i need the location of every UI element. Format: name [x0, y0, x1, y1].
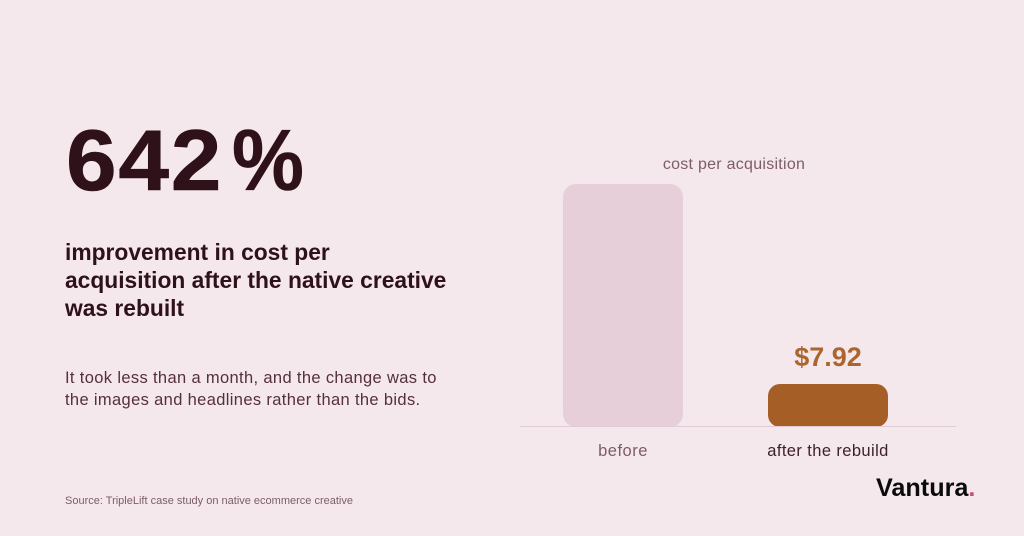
chart title: cost per acquisition — [663, 156, 805, 173]
bar: after the rebuild — [768, 384, 888, 427]
supporting text: It took less than a month, and the change was to — [65, 369, 437, 387]
subheading: improvement in cost per — [65, 239, 330, 265]
logo: Vantura. — [876, 474, 975, 502]
supporting text: the images and headlines rather than the bids. — [65, 391, 420, 409]
supporting text — [65, 369, 437, 409]
baseline — [520, 426, 956, 427]
bar: before — [563, 184, 683, 427]
big statistic: % — [232, 113, 304, 209]
big statistic: 642 — [66, 113, 223, 209]
subheading — [65, 239, 446, 321]
source note: Source: TripleLift case study on native ecommerce creative — [65, 495, 353, 507]
bar chart — [520, 156, 956, 460]
big statistic — [66, 113, 304, 209]
label: after the rebuild: after the rebuild — [767, 442, 889, 460]
label: before: before — [598, 442, 648, 460]
subheading: acquisition after the native creative — [65, 267, 446, 293]
value label: $7.92 — [794, 342, 862, 372]
subheading: was rebuilt — [65, 295, 184, 321]
